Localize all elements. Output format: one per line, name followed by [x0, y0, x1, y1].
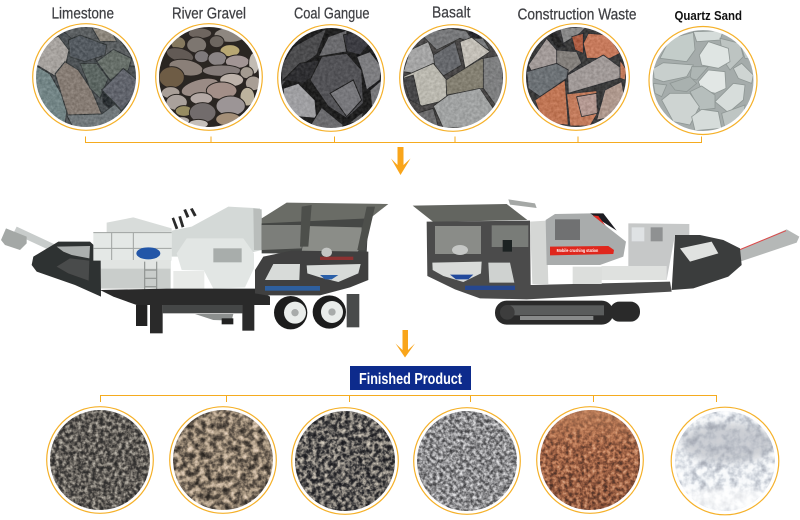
crusher cover with red band: Mobile crushing station: [557, 248, 599, 253]
arrow: machines to finished product: [396, 330, 415, 358]
discharge conveyor: [672, 229, 799, 290]
photo circle: construction waste: [520, 23, 633, 133]
photo circle: limestone aggregate: [47, 407, 153, 513]
label: Quartz Sand: Quartz Sand: [674, 8, 742, 23]
machine: tracked mobile crusher: [413, 199, 799, 325]
photo circle: basalt aggregate: [414, 408, 520, 514]
photo circle: river gravel aggregate: [170, 407, 276, 513]
wheels: [274, 295, 346, 329]
photo circle: basalt: [397, 23, 510, 133]
heading: Finished Product: Finished Product: [359, 371, 463, 388]
photo circle: river gravel: [156, 23, 263, 130]
machine: wheeled mobile crusher: [1, 203, 388, 333]
label: Limestone: Limestone: [52, 6, 114, 22]
discharge conveyor: [1, 227, 101, 297]
label: Construction Waste: Construction Waste: [518, 6, 637, 24]
crusher housing: [93, 207, 262, 305]
photo circle: construction waste aggregate: [537, 407, 643, 513]
hopper and engine body: [255, 203, 388, 295]
hopper and body: [413, 199, 672, 299]
panel: finished products: [47, 407, 779, 515]
photo circle: quartz sand powder: [671, 407, 779, 515]
photo circle: coal gangue: [277, 23, 387, 133]
arrow: materials to machines: [391, 147, 410, 175]
photo circle: quartz sand: [649, 26, 760, 137]
crusher cover with red band: [546, 213, 689, 284]
panel: raw materials: [30, 4, 760, 137]
connector: raw materials bracket: [86, 136, 702, 142]
label: Basalt: Basalt: [432, 4, 471, 22]
chassis and legs: [100, 289, 359, 333]
heading: Finished Product: [350, 366, 471, 390]
label: Coal Gangue: Coal Gangue: [294, 6, 370, 22]
photo circle: coal gangue aggregate: [292, 408, 398, 514]
crawler tracks: [495, 301, 640, 325]
connector: finished product bracket: [100, 396, 716, 402]
photo circle: limestone: [30, 20, 143, 133]
label: River Gravel: River Gravel: [172, 6, 246, 22]
